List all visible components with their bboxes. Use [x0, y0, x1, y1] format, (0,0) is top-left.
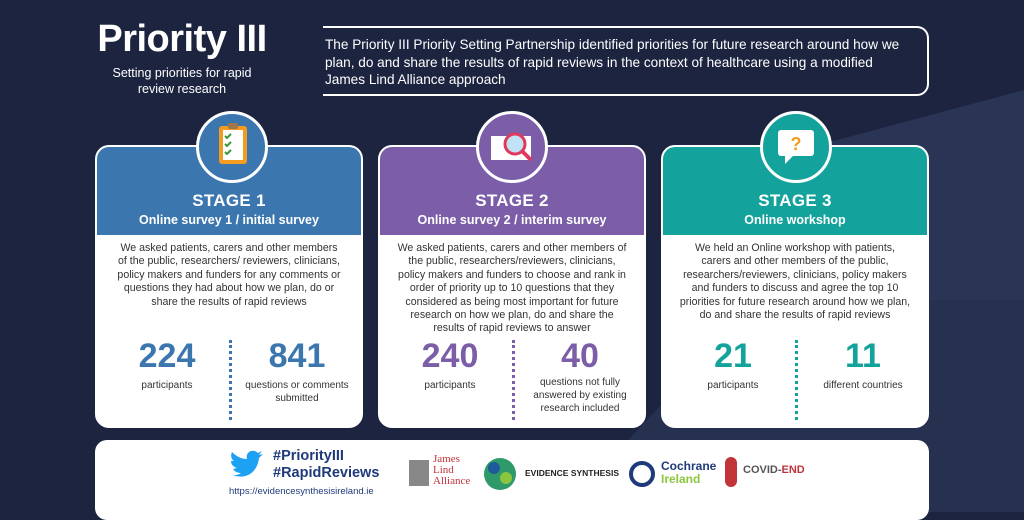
title: Priority III [97, 18, 267, 60]
logos [409, 453, 470, 487]
footer panel: Ireland [661, 472, 700, 486]
panel: stage 3: We held an Online workshop with patients, carers and other members of the public, researchers/reviewers, clinicians, policy makers and funders to discuss and agree the top 10 priorities for future research around how we plan, do and share the results of rapid reviews [680, 242, 910, 321]
footer panel: https://evidencesynthesisireland.ie [229, 486, 374, 497]
icon: speech bubble [760, 111, 832, 183]
logos: Alliance [433, 475, 470, 487]
footer panel: EVIDENCE SYNTHESIS [525, 468, 619, 478]
footer panel [95, 440, 929, 520]
intro text box [323, 26, 929, 96]
panel: stage 2: 40 [561, 337, 599, 375]
panel: stage 1: participants [141, 380, 193, 391]
hashtags: #RapidReviews [273, 465, 379, 481]
panel: stage 2: Online survey 2 / interim survey [418, 213, 606, 227]
footer panel: Cochrane [661, 459, 716, 473]
icon: speech bubble: ? [790, 134, 802, 154]
panel: stage 3: different countries [823, 380, 903, 391]
title [97, 18, 267, 96]
panel: stage 2: questions not fully answered by existing research included [533, 377, 627, 414]
logos: James [433, 453, 460, 465]
panel: stage 1: 224 [139, 337, 195, 375]
panel: stage 1: questions or comments submitted [245, 380, 349, 404]
panel: stage 3: STAGE 3 [758, 191, 832, 210]
intro text box: The Priority III Priority Setting Partnership identified priorities for future research around how we plan, do and share the results of rapid reviews in the context of healthcare using a modified James Lind Alliance approach [325, 37, 899, 87]
footer panel: COVID-END [743, 464, 805, 476]
panel: stage 3: 11 [845, 337, 881, 375]
panel: stage 1: We asked patients, carers and other members of the public, researchers/ reviewers, clinicians, policy makers and funders for any comments or questions they had about how we plan, do or share the results of rapid reviews [117, 242, 341, 308]
panel: stage 1: 841 [269, 337, 325, 375]
icon: twitter bird [231, 450, 263, 477]
panel: stage 2: 240 [422, 337, 478, 375]
panel: stage 1: STAGE 1 [192, 191, 266, 210]
panel: stage 2: participants [424, 380, 476, 391]
logos: Lind [433, 464, 454, 476]
title: review research [138, 82, 226, 96]
icon: clipboard [196, 111, 268, 183]
panel: stage 2: We asked patients, carers and other members of the public, researchers/reviewers, clinicians, policy makers and funders to choose and rank in order of priority up to 10 questions that they considered as being most important for future research on how we plan, do and share the results of rapid reviews to answer [398, 242, 626, 334]
panel: stage 3: 21 [714, 337, 752, 375]
title: Setting priorities for rapid [113, 66, 251, 80]
panel: stage 1 [95, 145, 363, 428]
panel: stage 2: STAGE 2 [475, 191, 549, 210]
icon: magnifier [476, 111, 548, 183]
panel: stage 3: participants [707, 380, 759, 391]
panel: stage 2 [378, 145, 646, 428]
hashtags [273, 448, 379, 481]
panel: stage 1: Online survey 1 / initial survey [139, 213, 319, 227]
panel: stage 3 [661, 145, 929, 428]
panel: stage 3: Online workshop [744, 213, 846, 227]
hashtags: #PriorityIII [273, 448, 344, 464]
